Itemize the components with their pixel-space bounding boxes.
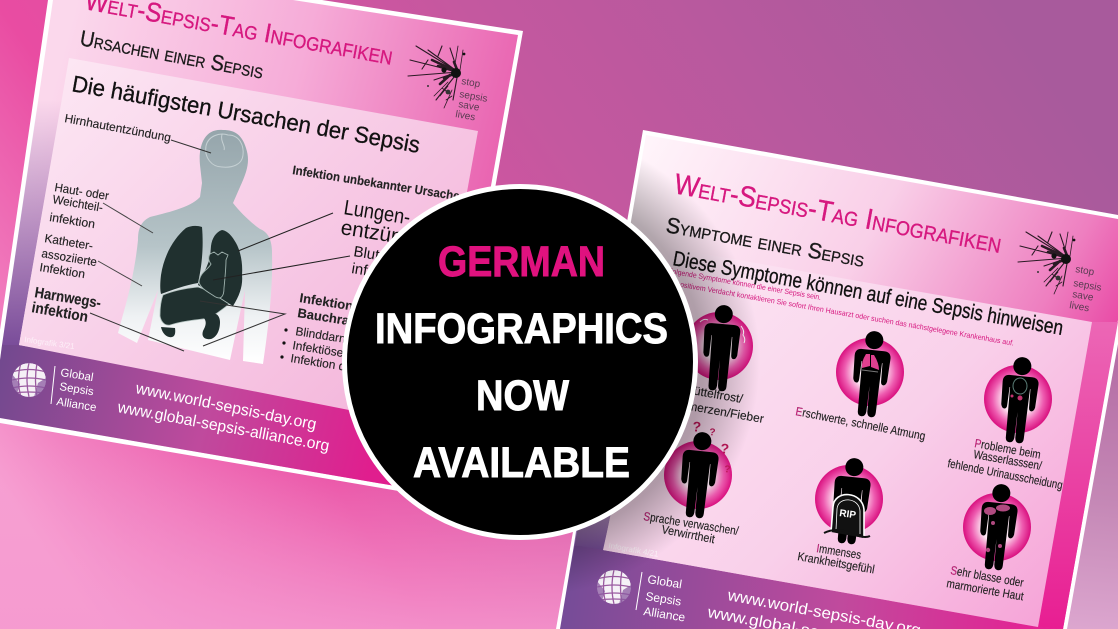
badge text: INFOGRAPHICS: INFOGRAPHICS (375, 305, 668, 353)
label text: Harnwegs- (33, 284, 102, 312)
website links: www.global-sepsis-alliance.org (115, 399, 331, 455)
icon: ink splatter (1018, 232, 1075, 294)
card: Symptome einer Sepsis (556, 130, 1118, 629)
logo: Global Sepsis Alliance (597, 570, 687, 625)
human body illustration (118, 130, 272, 364)
card border (556, 130, 1118, 629)
symptom label: Immenses (816, 541, 862, 562)
card background (560, 135, 1118, 629)
symptom: Sehr blasse Haut (945, 482, 1031, 604)
leader lines (200, 301, 285, 346)
label: Harnwegsinfektion (30, 284, 184, 351)
logo: Global Sepsis Alliance (12, 363, 97, 414)
badge text: AVAILABLE: AVAILABLE (413, 439, 630, 487)
logo text: lives (1068, 300, 1090, 314)
card border (0, 0, 523, 498)
bullet list (280, 324, 350, 374)
logo text: Alliance (56, 396, 97, 414)
icon: question marks (692, 418, 731, 476)
liver and abdomen (160, 287, 229, 325)
icon ring (836, 338, 904, 406)
label text: Hirnhautentzündung (63, 111, 172, 145)
label: Blutstrominfektion (213, 243, 423, 286)
infographic number: Infografik 3/21 (24, 335, 76, 351)
label text: Katheter- (44, 231, 94, 253)
symptom: Erschwerte Atmung (794, 329, 927, 443)
inner panel (19, 58, 478, 425)
logo text: save (1071, 289, 1095, 304)
left lung (160, 226, 203, 294)
circle shadow on card (568, 165, 754, 582)
logo text (1068, 264, 1102, 314)
icon: question marks: ? (720, 440, 730, 457)
symptom label: fehlende Urinausscheidung (946, 456, 1064, 492)
icon: person with marbled skin (975, 482, 1020, 572)
icon: person behind tombstone: RIP (839, 508, 857, 521)
intro text in red: Folgende Symptome können die einer Sepsis sein. (668, 266, 822, 302)
leader line (171, 140, 211, 153)
leader line (213, 256, 350, 280)
label: Haut- oder Weichteilinfektion (49, 180, 153, 233)
logo text: Sepsis (59, 381, 95, 398)
leader line (103, 203, 153, 233)
footer band (0, 345, 440, 493)
label text: Infektion im (299, 290, 373, 316)
symptom label: Schüttelfrost/ (672, 380, 745, 406)
icon ring (664, 441, 732, 509)
label: Infektion unbekannter Ursache: Infektion unbekannter Ursache (292, 163, 461, 203)
symptom label: Probleme beim (973, 436, 1042, 462)
label: Katheter-assoziierte Infektion (39, 231, 142, 286)
leader line (90, 313, 184, 351)
symptom label (796, 541, 876, 576)
label: Infektionen im Bauchraum (200, 290, 373, 374)
symptom label: Gliederschmerzen/Fieber (630, 389, 765, 426)
bullet list: Blinddarm (295, 324, 350, 346)
symptom: Probleme beim Wasserlassen (946, 355, 1064, 492)
icon: person with lungs (848, 329, 893, 419)
logo text: sepsis (458, 89, 488, 105)
label: Blutstrominfektion: infektion (350, 260, 408, 286)
logo text: Alliance (643, 604, 687, 625)
right lung (198, 230, 242, 306)
badge text: NOW: NOW (476, 372, 569, 420)
card background (0, 0, 518, 493)
logo: stop sepsis save lives (408, 46, 488, 123)
label: Haut- oder Weichteilinfektion: Weichteil- (51, 192, 104, 215)
heart (199, 252, 228, 298)
panel heading: Die häufigsten Ursachen der Sepsis (70, 70, 422, 158)
leader line (98, 261, 142, 286)
label: Infektionen im Bauchraum: Bauchraum (297, 305, 370, 331)
symptom: Sprache verwaschen (643, 418, 740, 546)
bullet list: Infektion d (290, 351, 346, 374)
symptom label (945, 563, 1025, 604)
stomach (202, 314, 220, 339)
infographic number: Infografik 4/21 (608, 541, 660, 559)
icon: person (676, 430, 721, 520)
card title: Welt-Sepsis-Tag Infografiken (672, 168, 1004, 260)
right edge tint (1038, 322, 1118, 629)
logo text: sepsis (1072, 278, 1102, 294)
label: Harnwegsinfektion: infektion (30, 299, 89, 326)
symptom: Immenses Krankheitsgefühl (796, 456, 883, 576)
logo text: stop (460, 76, 481, 90)
icon: question marks: ? (709, 427, 716, 439)
logo: stop sepsis save lives (1018, 232, 1102, 314)
central badge (344, 186, 696, 538)
brain outline (206, 134, 243, 167)
symptom label: Erschwerte, schnelle Atmung (794, 404, 927, 443)
intro text in red: Bei positivem Verdacht kontaktieren Sie sofort Ihren Hausarzt oder suchen das nächstgelegene Krankenhaus auf. (664, 277, 1015, 348)
label: Katheter-assoziierte Infektion: Infektion (39, 260, 86, 281)
background: lower right corner (1066, 330, 1118, 629)
icon: shivering person (699, 304, 745, 392)
symptom label: Verwirrtheit (660, 522, 717, 546)
symptom label: Krankheitsgefühl (796, 549, 876, 576)
badge text: GERMAN: GERMAN (438, 238, 605, 286)
symptom label: marmorierte Haut (945, 576, 1025, 604)
label: Hirnhautentzündung (63, 111, 211, 153)
label text: Haut- oder (54, 180, 110, 203)
icon ring (984, 365, 1052, 433)
logo divider (51, 366, 55, 404)
symptom label: Sprache verwaschen/ (643, 509, 740, 538)
label text: Lungen- (342, 196, 412, 229)
symptom label (946, 436, 1064, 492)
logo text: Global (60, 367, 94, 384)
label: Katheter-assoziierte Infektion: assoziierte (41, 246, 98, 269)
symptom: Schüttelfrost (630, 304, 765, 426)
label: Lungenentzündung (238, 196, 449, 256)
label: Haut- oder Weichteilinfektion: infektion (49, 210, 96, 231)
badge circle (344, 186, 696, 538)
logo text (454, 76, 488, 123)
logo text: lives (454, 109, 476, 123)
icon: globe (12, 363, 46, 397)
label: Lungenentzündung: entzündung (339, 216, 449, 256)
logo text: save (457, 99, 481, 114)
icon: question marks: ? (724, 464, 731, 476)
icon ring (685, 312, 753, 380)
inner panel (603, 248, 1092, 627)
website links: www.world-sepsis-day.org (133, 380, 318, 434)
card subtitle: Symptome einer Sepsis (664, 212, 866, 272)
logo text: Global (647, 572, 683, 591)
icon ring (963, 493, 1031, 561)
body silhouette (118, 130, 272, 364)
symptom label: Wasserlasssen/ (972, 447, 1043, 473)
icon: person with urinary organs (996, 355, 1041, 445)
card subtitle: Ursachen einer Sepsis (78, 25, 266, 83)
icon ring (815, 465, 883, 533)
left margin fade (574, 370, 640, 552)
label text: Blutstrom- (352, 243, 423, 271)
logo text (643, 572, 687, 625)
card: Ursachen einer Sepsis (0, 0, 523, 498)
left margin fade (2, 100, 62, 345)
leader line (238, 213, 333, 251)
logo divider (636, 572, 642, 610)
logo text (56, 367, 97, 414)
bullet list: Infektiöse (292, 338, 345, 360)
background: lighter lower area (0, 440, 1118, 629)
icon: question marks: ? (692, 418, 702, 435)
icon: ink splatter (408, 46, 465, 108)
symptom label: Sehr blasse oder (949, 563, 1025, 590)
icon: globe (597, 570, 631, 604)
logo text: stop (1074, 264, 1095, 278)
small organ left (161, 327, 175, 337)
footer band (560, 545, 1063, 629)
logo text: Sepsis (645, 589, 682, 609)
